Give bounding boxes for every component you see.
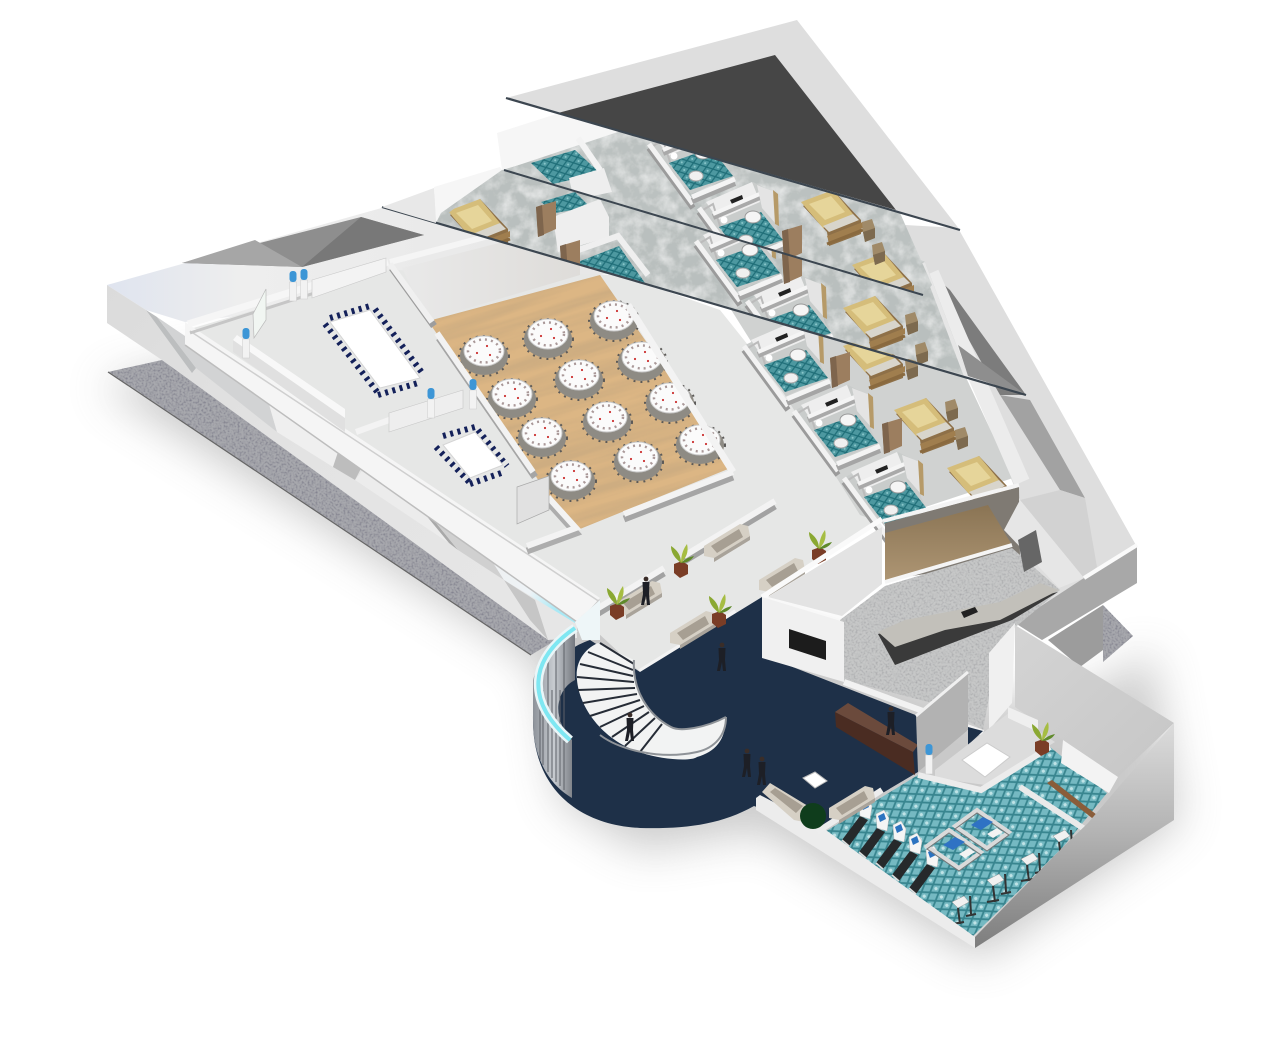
conference table (330, 310, 420, 388)
spiral stair and glass cylinder (533, 600, 726, 798)
bench and low wall (1047, 780, 1097, 818)
front rim (756, 795, 975, 948)
roof plate (506, 20, 960, 230)
hotel rooms ground floor (725, 225, 1137, 667)
end wall (1015, 545, 1137, 640)
weight benches (927, 810, 1009, 871)
room outer wall (931, 273, 1022, 482)
lobby people (625, 643, 766, 785)
lounge partition (817, 790, 882, 832)
navy wedge (968, 727, 983, 745)
banquet hall back wall (390, 212, 580, 320)
cafe low wall (918, 747, 1050, 790)
floor 2 marble (436, 120, 968, 376)
white landing block (575, 600, 600, 640)
navy rotunda floor (533, 597, 918, 830)
glass cylinder (533, 628, 575, 798)
back rim (883, 485, 1019, 521)
cafe table (962, 743, 1010, 777)
stage wood floor (885, 505, 1012, 582)
cafe cabinet (1008, 707, 1038, 732)
glass tip (958, 345, 1026, 395)
water coolers (242, 269, 476, 418)
locker block (1061, 740, 1118, 793)
grey wall beside cafe (916, 672, 968, 772)
banquet hall wood floor (432, 275, 728, 529)
meeting room back wall (188, 262, 388, 333)
floor 3 marble (504, 131, 932, 295)
hall sofas and plants (607, 524, 832, 649)
stage edge (885, 545, 1012, 582)
interior partition walls (356, 264, 775, 678)
right sloped wall (975, 723, 1174, 948)
upper floor slab (497, 114, 932, 296)
small table (443, 432, 503, 478)
flip chart (517, 476, 549, 524)
room floor (725, 240, 1013, 522)
gravel ground strip (108, 360, 1133, 662)
lounge sofas (762, 783, 875, 824)
floor 2 rooms (448, 192, 968, 376)
granite floor (840, 548, 1060, 730)
island base (878, 592, 1058, 665)
weights (952, 830, 1077, 924)
slab below the end wall (1048, 605, 1103, 667)
cyan top arc (538, 628, 575, 740)
stair rails (600, 660, 726, 755)
left slab edge (382, 188, 436, 223)
long side cabinet (233, 340, 345, 432)
gym back wall (1015, 625, 1174, 777)
meeting room furniture (233, 258, 549, 524)
left wing roof and top band (107, 140, 640, 322)
projection screen (253, 289, 266, 338)
mid grey strip (1000, 395, 1085, 498)
hobs (961, 607, 978, 618)
treads (577, 643, 662, 752)
low wall below kitchen (844, 682, 983, 733)
divider wall (989, 623, 1015, 730)
TV (789, 629, 826, 660)
conference table chairs (325, 306, 507, 484)
gym floor (823, 747, 1107, 937)
ground floor slab (190, 270, 880, 672)
divider cabinets (389, 390, 463, 432)
floor 3 back wall (497, 100, 625, 170)
treadmills (842, 798, 939, 894)
slab cut edge (382, 207, 1026, 395)
floor 3 rooms (531, 142, 914, 292)
glass mullions (540, 640, 564, 790)
island top (878, 583, 1059, 647)
floor 2 back wall (434, 167, 502, 223)
exterior wall strip (905, 225, 1137, 640)
stair body (577, 643, 726, 760)
facade white rim (185, 322, 600, 622)
inner edge strip (1020, 490, 1097, 578)
banquet round tables (459, 301, 725, 501)
gym (756, 623, 1174, 948)
rear cabinets (312, 258, 386, 298)
floor 3 cut edge (504, 170, 923, 295)
reception desk (835, 703, 918, 775)
left wing facade (107, 285, 577, 640)
side cabinet top (233, 335, 345, 418)
mid floor slab (382, 165, 1026, 396)
TV wall (762, 597, 844, 682)
cooker (1018, 530, 1042, 572)
soft ground shadow (100, 340, 1180, 960)
dark back wall (885, 487, 1020, 580)
lobby diagonal wall inner (768, 527, 882, 616)
dark plant (800, 803, 826, 829)
cafe floor (935, 712, 1055, 785)
kitchen and stage room (762, 485, 1084, 733)
coffee table (803, 772, 827, 788)
lobby wall top (762, 519, 882, 597)
right white wall (1004, 500, 1084, 588)
dark upper strip (931, 273, 1026, 395)
